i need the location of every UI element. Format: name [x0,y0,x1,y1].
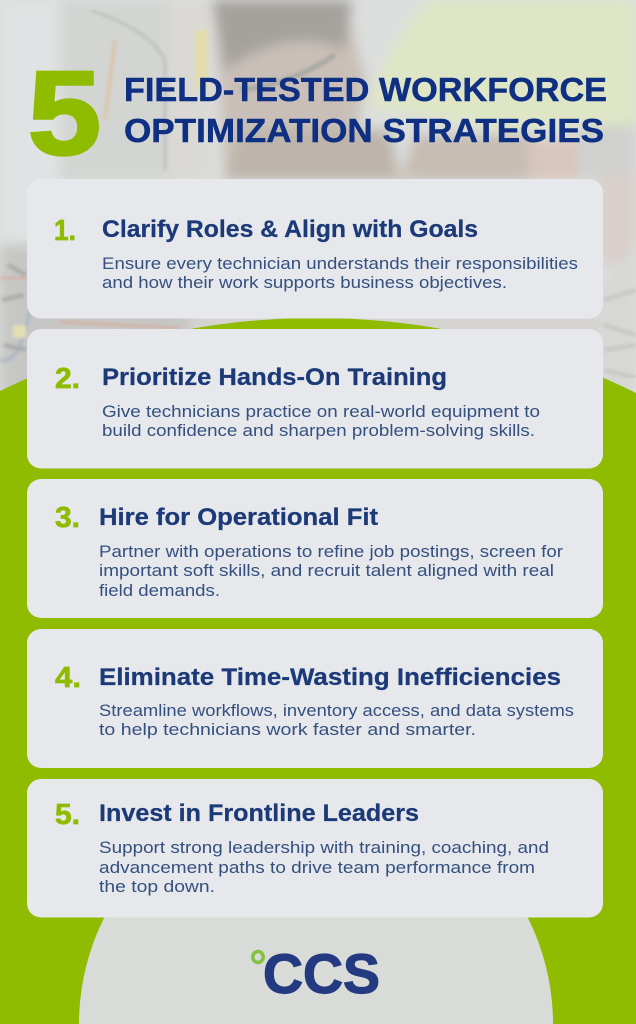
body 3: field demands. [99,582,220,600]
body 3 [99,543,564,600]
body 2: build confidence and sharpen problem-solving skills. [102,422,535,440]
body 2: Give technicians practice on real-world equipment to [102,403,540,421]
panel: strategy 5 [27,779,603,918]
number 4: 4. [55,662,81,694]
logo: CCS [253,942,380,1005]
title: OPTIMIZATION STRATEGIES [124,113,604,150]
grey circle behind logo [79,787,553,1024]
green arc background [0,318,636,1024]
body 4: Streamline workflows, inventory access, and data systems [99,702,574,720]
body 1: Ensure every technician understands their responsibilities [102,255,578,273]
number 2: 2. [55,363,80,395]
title: FIELD-TESTED WORKFORCE [124,72,607,109]
body 5 [99,839,549,896]
body 1: and how their work supports business objectives. [102,274,507,292]
body 1 [102,255,578,292]
body 3: Partner with operations to refine job postings, screen for [99,543,564,561]
body 5: Support strong leadership with training, coaching, and [99,839,549,857]
heading 3: Hire for Operational Fit [99,504,378,531]
panel: strategy 2 [27,329,603,468]
body 4 [99,702,574,739]
heading 1: Clarify Roles & Align with Goals [102,216,478,243]
heading 4: Eliminate Time-Wasting Inefficiencies [99,664,561,691]
number 3: 3. [55,502,80,534]
body 3: important soft skills, and recruit talent aligned with real [99,562,554,580]
body 4: to help technicians work faster and smarter. [99,721,476,739]
number 1: 1. [54,215,76,247]
big number five: 5 [28,47,101,180]
body 5: the top down. [99,878,215,896]
panel: strategy 3 [27,479,603,618]
title [124,72,607,150]
logo wordmark: CCS [263,942,380,1005]
panel: strategy 1 [27,179,603,318]
background photo: technicians at electrical panel [0,0,636,420]
heading 5: Invest in Frontline Leaders [99,800,419,827]
panel: strategy 4 [27,629,603,768]
body 5: advancement paths to drive team performance from [99,859,535,877]
body 2 [102,403,540,440]
number 5: 5. [55,799,80,831]
icon: degree ring [253,952,263,962]
heading 2: Prioritize Hands-On Training [102,364,447,391]
